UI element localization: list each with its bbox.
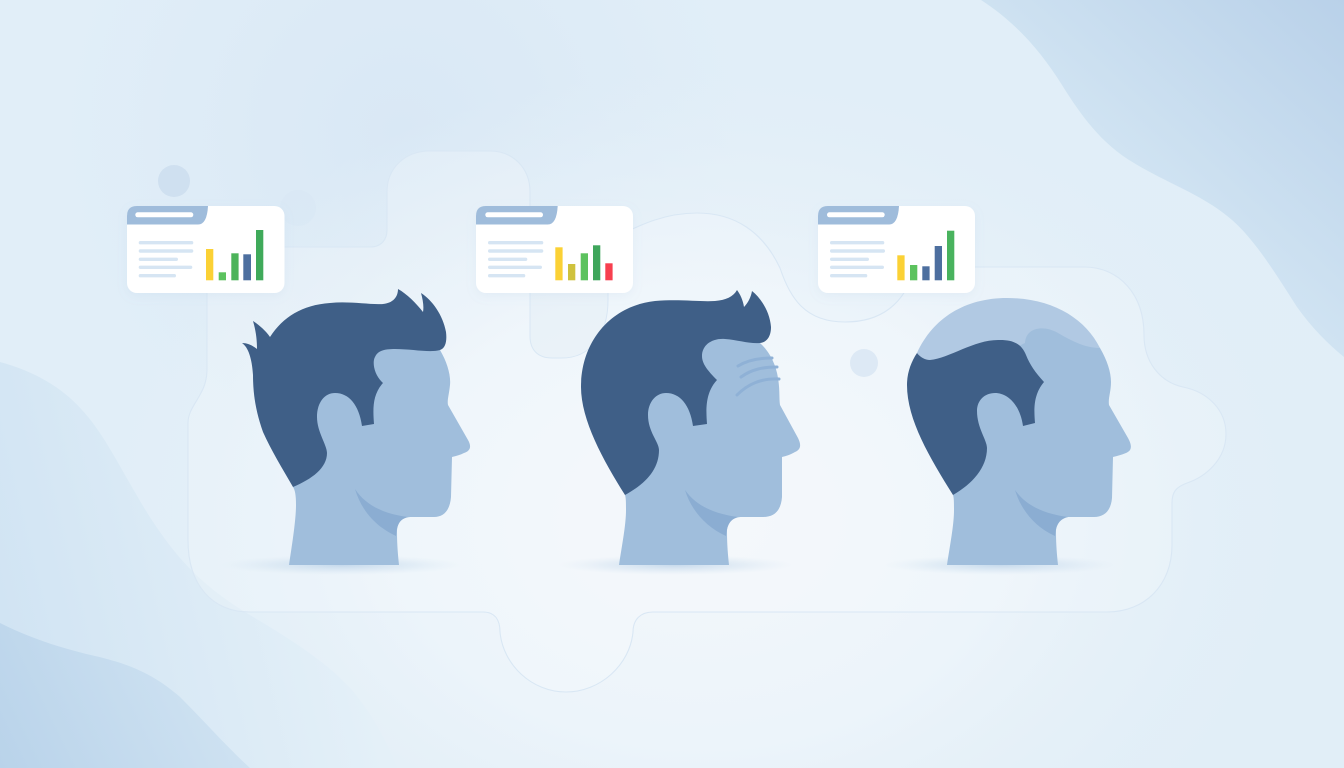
ground shadow	[557, 555, 793, 575]
panel outline: small rounded tab	[530, 285, 608, 358]
bar chart	[897, 231, 954, 280]
jaw shadow	[685, 490, 738, 536]
report card 2	[476, 206, 633, 293]
bald crown	[917, 298, 1100, 370]
hair	[242, 289, 446, 487]
hair	[907, 340, 1044, 495]
decorative dot: upper left	[158, 165, 190, 197]
card header	[476, 206, 558, 224]
stage 3: receding hairline	[884, 298, 1131, 575]
text lines	[488, 241, 543, 277]
forehead wrinkles	[737, 358, 779, 395]
header pill	[827, 212, 885, 217]
head	[940, 305, 1131, 565]
text lines	[830, 241, 885, 277]
header pill	[485, 212, 543, 217]
card body	[476, 206, 633, 293]
hair	[581, 290, 771, 495]
bar chart	[555, 245, 613, 280]
card body	[818, 206, 975, 293]
stage 2: hair with forehead wrinkles	[557, 290, 800, 575]
background wave: bottom left corner	[0, 623, 250, 768]
card body	[127, 206, 284, 293]
card header	[818, 206, 899, 224]
head	[619, 325, 800, 565]
ground shadow	[220, 555, 464, 575]
background wave: top right	[981, 0, 1344, 357]
panel outline: rounded backdrop	[188, 151, 1226, 692]
background wave: lower left	[0, 362, 397, 768]
text lines	[139, 241, 193, 277]
bar chart	[206, 230, 263, 280]
report card 3	[818, 206, 975, 293]
head	[289, 330, 470, 565]
card header	[127, 206, 208, 224]
stage 1: full hair	[220, 289, 470, 575]
ground shadow	[884, 555, 1116, 575]
header pill	[135, 212, 193, 217]
decorative dot: faint	[280, 190, 316, 226]
jaw shadow	[355, 489, 408, 536]
decorative dot: centre right	[850, 349, 878, 377]
report card 1	[127, 206, 284, 293]
jaw shadow	[1015, 490, 1068, 536]
